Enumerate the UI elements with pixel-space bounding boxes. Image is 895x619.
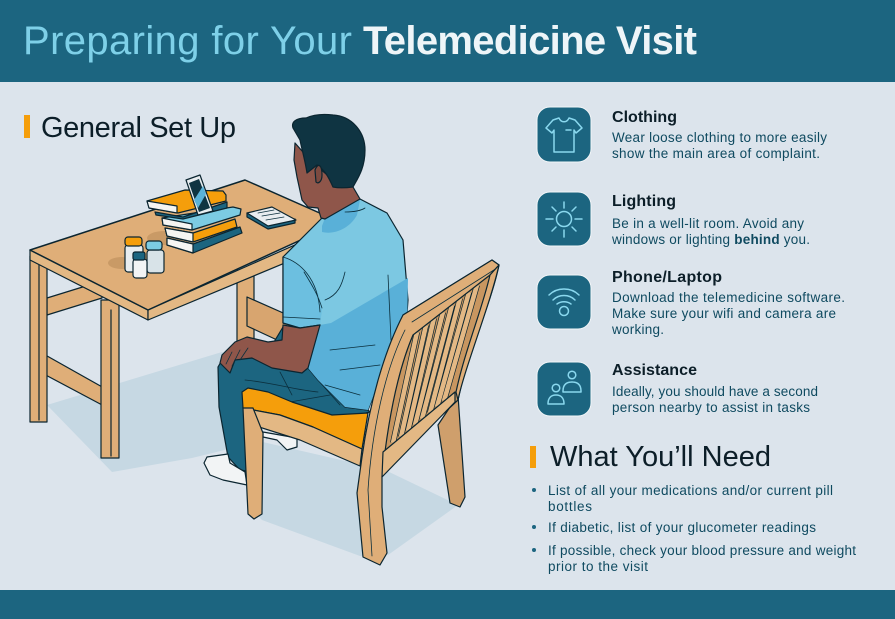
item: assistance: Ideally, you should have a second <box>612 384 818 399</box>
item: assistance: person nearby to assist in tasks <box>612 400 810 415</box>
pill bottles <box>125 237 164 278</box>
rear chair leg <box>438 395 465 507</box>
title <box>23 19 697 63</box>
item: phone/laptop: working. <box>611 322 664 337</box>
table left leg <box>30 256 47 422</box>
phone <box>186 175 213 215</box>
hair <box>293 114 365 188</box>
header band <box>0 0 895 82</box>
item: lighting: Be in a well-lit room. Avoid any <box>612 216 804 231</box>
icon: t-shirt <box>537 107 591 162</box>
item: phone/laptop: Make sure your wifi and camera are <box>612 306 836 321</box>
chair post and top rail <box>357 260 499 565</box>
table back leg and stretchers <box>40 270 290 406</box>
item: assistance <box>537 362 818 416</box>
floor shadows <box>47 352 458 556</box>
icon: wifi <box>537 275 591 329</box>
heading: What You'll Need: What You’ll Need <box>550 441 771 473</box>
checklist: If diabetic, list of your glucometer readings <box>548 520 816 535</box>
illustration: table <box>30 180 340 458</box>
item: clothing <box>537 107 827 162</box>
head and neck <box>294 143 360 219</box>
checklist: prior to the visit <box>548 559 648 574</box>
notebook <box>247 207 296 229</box>
item: phone/laptop: Download the telemedicine software. <box>612 290 845 305</box>
checklist: If possible, check your blood pressure and weight <box>548 543 856 558</box>
chair right upright <box>456 265 499 400</box>
table top <box>30 180 340 320</box>
item: clothing: Clothing <box>612 109 677 126</box>
footer band <box>0 590 895 619</box>
shirt <box>283 199 408 410</box>
checklist: List of all your medications and/or current pill <box>548 483 833 498</box>
item: clothing: show the main area of complaint. <box>612 146 820 161</box>
title: Telemedicine Visit <box>363 19 697 63</box>
checklist <box>532 483 856 574</box>
trousers <box>218 327 370 472</box>
seat cushion <box>242 388 368 449</box>
item: lighting: windows or lighting behind you. <box>611 232 810 247</box>
books stack <box>147 190 242 253</box>
front chair leg <box>243 408 263 519</box>
illustration: seated man <box>204 114 408 485</box>
item: phone/laptop <box>537 269 845 337</box>
title: Preparing for Your <box>23 19 352 63</box>
seat frame <box>243 408 362 466</box>
item: lighting: Lighting <box>612 193 676 210</box>
table front leg <box>101 300 119 458</box>
item: phone/laptop: Phone/Laptop <box>612 269 722 286</box>
icon: two people <box>537 362 591 416</box>
illustration: chair <box>242 260 499 565</box>
heading: General Set Up: General Set Up <box>41 112 236 144</box>
arm and hand <box>220 325 320 373</box>
item: clothing: Wear loose clothing to more easily <box>612 130 827 145</box>
ear <box>315 165 322 183</box>
checklist: bottles <box>548 499 592 514</box>
rear shoe <box>263 432 297 450</box>
item: lighting <box>537 192 810 247</box>
item: assistance: Assistance <box>612 362 697 379</box>
icon: sun <box>537 192 591 246</box>
chair back slats <box>383 260 499 470</box>
front shoe <box>204 454 247 485</box>
lower rail <box>382 392 455 477</box>
